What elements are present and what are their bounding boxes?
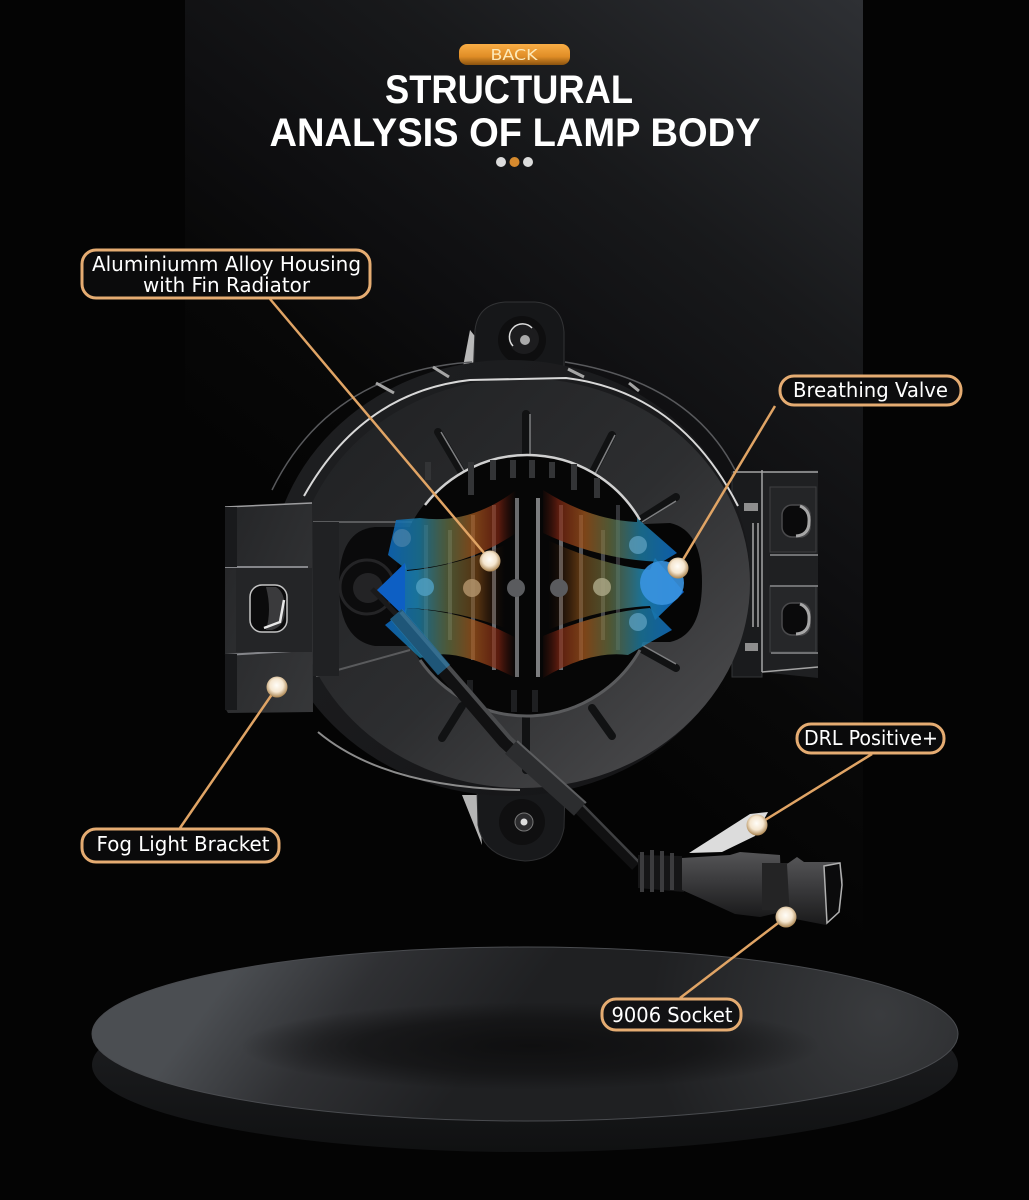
- label: 9006 socket: [602, 999, 741, 1030]
- left socket: [340, 560, 405, 617]
- DRL white wires: [689, 812, 768, 853]
- ring highlight: [304, 378, 738, 506]
- label: aluminium housing: Aluminiumm Alloy Housing: [92, 252, 361, 276]
- fins: [426, 460, 618, 712]
- label: breathing valve: Breathing Valve: [793, 378, 948, 402]
- bracket hole: [250, 585, 287, 632]
- label: DRL positive: DRL Positive+: [804, 726, 938, 750]
- title: [270, 68, 761, 155]
- back badge: [459, 44, 570, 65]
- title dots: [496, 157, 533, 167]
- central gradient panel: [185, 0, 863, 1200]
- left housing ledge: [313, 522, 412, 676]
- fin dots: [393, 529, 647, 631]
- left bracket: [225, 503, 339, 713]
- platform: [92, 947, 958, 1152]
- marker dots: [266, 550, 796, 928]
- heat band right: [543, 490, 684, 678]
- label: 9006 socket: 9006 Socket: [612, 1003, 733, 1027]
- title: ANALYSIS OF LAMP BODY: [270, 111, 761, 155]
- blue valve circle: [640, 561, 684, 605]
- left socket slot: [339, 527, 430, 646]
- bracket holes: [782, 505, 810, 635]
- outer housing ring: [270, 360, 750, 796]
- top mounting tab: [462, 302, 564, 379]
- back badge: BACK: [490, 46, 539, 64]
- heat band left: [377, 490, 516, 678]
- outer ridge: [272, 362, 735, 490]
- radial ribs: [438, 414, 676, 770]
- title: STRUCTURAL: [385, 68, 633, 112]
- label: fog light bracket: Fog Light Bracket: [96, 832, 270, 856]
- lamp body: [225, 302, 818, 866]
- central fin window: [396, 455, 656, 715]
- label: aluminium housing: with Fin Radiator: [143, 273, 311, 297]
- label: aluminium housing: [82, 250, 370, 298]
- right vent slot: [620, 523, 702, 642]
- bottom mounting tab: [462, 790, 565, 861]
- housing face: [294, 378, 750, 788]
- connector: [638, 812, 843, 925]
- cable: [372, 589, 639, 866]
- leader lines: [180, 299, 872, 998]
- label: fog light bracket: [82, 829, 279, 862]
- right bracket: [732, 470, 818, 678]
